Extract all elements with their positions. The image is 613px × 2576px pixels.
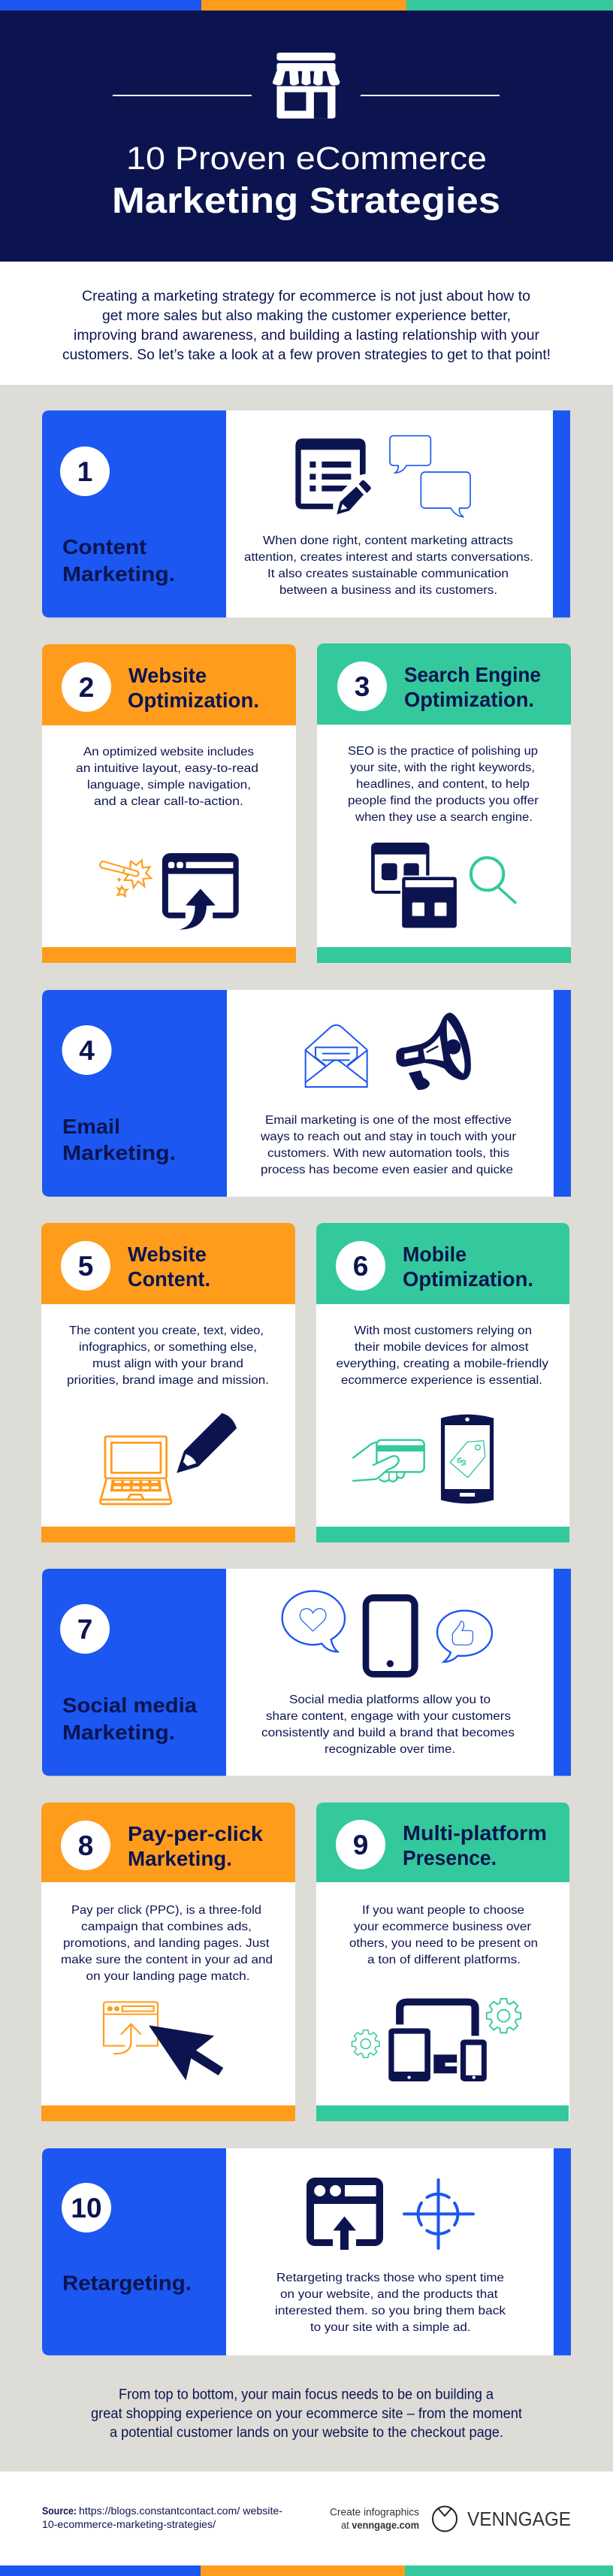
heading: Presence. [403,1846,497,1869]
number badge: 4 [79,1035,95,1066]
description: ecommerce experience is essential. [341,1374,542,1387]
title [112,141,500,221]
description: campaign that combines ads, [81,1921,252,1933]
intro text [62,289,551,363]
description: headlines, and content, to help [356,778,530,791]
icon: browser with upload arrow, outline [104,2002,158,2054]
icon: venngage logo [433,2506,457,2532]
description: people find the products you offer [348,795,539,807]
number badge [336,1820,385,1869]
description: Email marketing is one of the most effective [265,1114,512,1127]
description: Social media platforms allow you to [289,1694,491,1706]
description: interested them. so you bring them back [275,2305,506,2317]
description [275,2272,506,2334]
icon: large gear [487,1999,521,2033]
heading [404,663,541,711]
description [349,1904,538,1966]
number badge: 1 [77,456,92,487]
number badge [60,1604,110,1654]
number badge [336,1241,385,1291]
number badge: 7 [77,1614,92,1645]
closing text: a potential customer lands on your website to the checkout page. [110,2425,503,2441]
heading [62,1694,197,1744]
heading: Mobile [403,1243,467,1266]
intro text: improving brand awareness, and building a lasting relationship with your [74,328,540,344]
panel: 1 content marketing [42,410,570,618]
description: recognizable over time. [325,1743,455,1756]
description: priorities, brand image and mission. [67,1374,269,1387]
icon: megaphone [396,1013,471,1090]
heading: Optimization. [403,1267,533,1291]
panel: 6 mobile optimization [316,1223,569,1542]
icon: heart speech bubble [282,1591,345,1651]
heading [128,1243,210,1291]
heading: Multi-platform [403,1821,547,1845]
heading [62,1115,176,1164]
source citation [42,2505,282,2530]
description: consistently and build a brand that becomes [261,1727,515,1739]
title: 10 Proven eCommerce [126,141,487,177]
icon: small gear [352,2030,379,2057]
description: everything, creating a mobile-friendly [337,1358,548,1370]
intro text: get more sales but also making the customer experience better, [102,308,511,324]
panel: 5 website content [41,1223,295,1542]
description: must align with your brand [92,1358,243,1370]
description: customers. With new automation tools, this [267,1147,509,1160]
description: an intuitive layout, easy-to-read [76,762,258,775]
description: SEO is the practice of polishing up [348,745,538,758]
heading: Retargeting. [62,2272,192,2294]
icon: chat bubbles [390,436,470,517]
icon: magnifying glass [471,858,516,904]
source citation: Source: [42,2505,77,2517]
panel: 10 retargeting [42,2148,571,2356]
icon: storefront [273,53,340,119]
description [261,1694,515,1756]
heading: Marketing. [62,562,175,586]
heading: Marketing. [128,1847,232,1870]
number badge [62,662,111,712]
heading: Email [62,1115,120,1138]
description: If you want people to choose [362,1904,524,1917]
heading: Search Engine [404,663,541,686]
description: infographics, or something else, [79,1341,257,1354]
description: a ton of different platforms. [367,1954,521,1966]
description: process has become even easier and quicke [261,1164,513,1176]
description: make sure the content in your ad and [61,1954,273,1966]
icon: smartphone [363,1594,418,1678]
icon: connected devices [388,2002,487,2081]
description: and a clear call-to-action. [94,795,243,808]
number badge [337,661,387,711]
number badge: 5 [78,1251,93,1282]
number badge: 3 [355,671,370,702]
intro text: Creating a marketing strategy for ecommerce is not just about how to [82,289,530,304]
closing text [91,2387,523,2441]
panel: 3 search engine optimization [317,643,571,963]
intro text: customers. So let’s take a look at a few proven strategies to get to that point! [62,347,551,363]
venngage credit: VENNGAGE [467,2508,571,2530]
icon: open envelope [306,1025,367,1087]
icon: phone with price tag: $ [454,1454,470,1469]
description [61,1904,273,1983]
number badge: 9 [353,1830,368,1860]
top colour bar [0,0,613,11]
icon: laptop [100,1436,171,1504]
heading: Marketing. [62,1141,176,1164]
description: When done right, content marketing attracts [263,534,513,547]
description: An optimized website includes [83,746,254,758]
heading: Website [128,664,207,687]
description: The content you create, text, video, [69,1324,264,1337]
venngage credit: at venngage.com [341,2519,419,2531]
description: With most customers relying on [355,1324,532,1337]
icon: browser with arrow [306,2178,383,2250]
icon: overlapping windows [371,843,457,928]
header band [0,11,613,262]
heading: Pay-per-click [128,1822,263,1845]
number badge: 2 [79,672,94,703]
description [67,1324,269,1387]
description: to your site with a simple ad. [310,2321,470,2334]
title: Marketing Strategies [112,181,500,221]
icon: browser with upload arrow [162,853,239,930]
number badge: 10 [71,2193,102,2223]
source citation: https://blogs.constantcontact.com/ website- [79,2505,282,2517]
description: It also creates sustainable communication [267,568,509,580]
closing text: great shopping experience on your ecommerce site – from the moment [91,2406,523,2422]
icon: article and pencil [295,438,371,514]
icon: mouse cursor [149,2025,223,2081]
description: Retargeting tracks those who spent time [276,2272,504,2284]
panel: 4 email marketing [42,990,571,1197]
icon: hand with credit card [353,1440,424,1482]
description: language, simple navigation, [87,779,251,792]
description [244,534,533,597]
heading [403,1243,533,1291]
description: attention, creates interest and starts conversations. [244,551,533,564]
description: others, you need to be present on [349,1937,538,1950]
description: on your website, and the products that [280,2288,498,2301]
icon: thumbs-up speech bubble [437,1611,492,1662]
icon: pencil [177,1413,237,1473]
heading: Social media [62,1694,197,1717]
source citation: 10-ecommerce-marketing-strategies/ [42,2518,216,2530]
description [260,1114,517,1176]
number badge [62,2183,111,2232]
heading: Marketing. [62,1721,175,1744]
description [348,745,539,824]
heading: Content [62,535,146,558]
panel: 8 pay-per-click marketing [41,1803,295,2121]
closing text: From top to bottom, your main focus needs to be on building a [119,2387,494,2402]
number badge: 8 [78,1830,93,1861]
panel: 9 multi-platform presence [316,1803,569,2121]
heading [403,1821,547,1869]
heading [62,535,175,586]
description: their mobile devices for almost [355,1341,529,1354]
panel: 7 social media marketing [42,1569,571,1775]
venngage credit [330,2506,571,2532]
description: between a business and its customers. [279,584,497,597]
number badge [61,1821,110,1870]
panel: 2 website optimization [42,644,296,963]
heading: Website [128,1243,207,1266]
description: promotions, and landing pages. Just [63,1937,270,1950]
heading [128,1822,263,1870]
icon: phone with price tag [441,1415,494,1503]
description: Pay per click (PPC), is a three-fold [71,1904,261,1917]
description: your ecommerce business over [354,1921,532,1933]
heading: Optimization. [404,688,534,711]
description [337,1324,548,1387]
bottom colour bar [0,2565,613,2576]
heading: Optimization. [128,689,259,712]
description: share content, engage with your customers [266,1710,511,1723]
number badge: 6 [353,1251,368,1282]
description: your site, with the right keywords, [350,761,535,774]
number badge [60,446,110,496]
description [76,746,258,808]
description: on your landing page match. [86,1970,249,1983]
description: when they use a search engine. [355,811,533,824]
icon: target crosshair [404,2180,473,2248]
heading [128,664,259,712]
number badge [62,1025,111,1075]
venngage credit: Create infographics [330,2506,419,2518]
icon: magic wand [100,860,151,896]
description: ways to reach out and stay in touch with your [260,1131,517,1143]
heading: Content. [128,1267,210,1291]
number badge [61,1241,110,1291]
